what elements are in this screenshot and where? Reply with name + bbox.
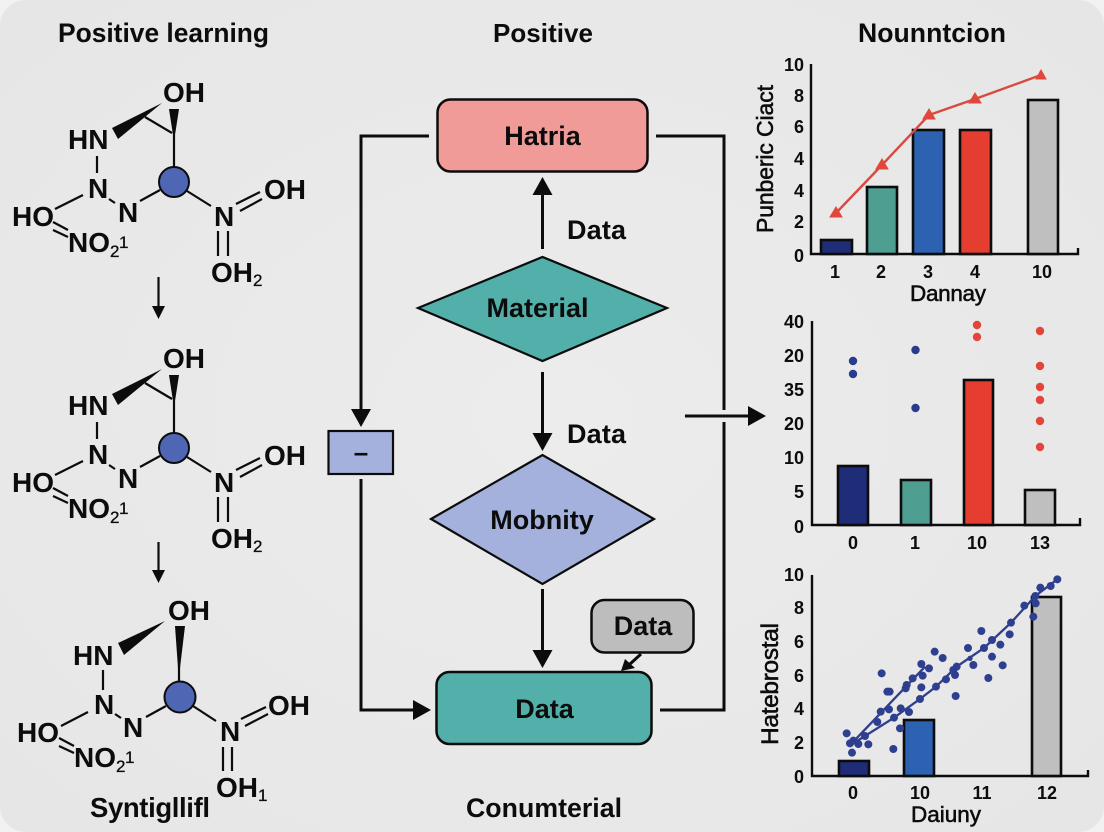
flow box: Data: [436, 672, 652, 744]
chart 1 x labels: 4: [970, 262, 980, 282]
flow box: Hatria: [438, 100, 648, 172]
chart 3 y ticks: 8: [794, 598, 804, 618]
chart 3 y ticks: 6: [794, 666, 804, 686]
chart 2 y ticks: 5: [794, 482, 804, 502]
chart 1 y ticks: [784, 55, 804, 266]
chart 2 y ticks: 20: [784, 414, 804, 434]
molecule 3: N: [94, 689, 114, 720]
chart 2 y ticks: [784, 312, 804, 537]
chart 2 axes: [812, 321, 1080, 525]
flow diamond: Mobnity: Mobnity: [490, 505, 594, 535]
caption: molecule column: Syntigllifl: [90, 792, 210, 823]
molecule 3: N: [123, 712, 143, 743]
molecule 3: HN: [73, 640, 113, 671]
molecule 2: N: [118, 463, 138, 494]
flow diamond: Material: Material: [486, 293, 589, 323]
arrow: Material down to Mobnity: [532, 372, 552, 451]
chart 2 y ticks: 35: [784, 380, 804, 400]
chart 3 scatter and trend lines: [843, 575, 1061, 757]
chart 1 y ticks: 8: [794, 86, 804, 106]
flow diamond: Material: [418, 257, 667, 361]
callout: Data bubble: Data: [614, 611, 673, 641]
arrow label: Data upper: Data: [567, 215, 627, 245]
arrow: Material up to Hatria: [532, 177, 552, 249]
arrow label: Data middle: Data: [567, 419, 627, 449]
chart 1: bars and line: [752, 55, 1078, 306]
chart 2 x labels: 10: [967, 533, 987, 553]
molecule 3: OH: [216, 772, 258, 803]
chart 1 x labels: 3: [923, 262, 933, 282]
chart 3 x labels: 0: [848, 783, 858, 803]
chart 3 y ticks: 10: [784, 565, 804, 585]
molecule 3: N: [220, 716, 240, 747]
chart 2 x labels: 0: [848, 533, 858, 553]
molecule 2: [12, 343, 306, 556]
molecule 2: HN: [68, 390, 108, 421]
molecule 3: 1: [125, 748, 134, 767]
callout arrow: [621, 654, 641, 671]
chart 3 y ticks: 0: [794, 767, 804, 787]
chart 1 y ticks: 6: [794, 117, 804, 137]
molecule 1: 2: [110, 242, 119, 261]
chart 3 x labels: 12: [1037, 783, 1057, 803]
chart 3 x-axis label: Daiuny: [911, 802, 982, 827]
flowchart connector: minus box to Data: [361, 479, 431, 720]
molecule 1: NO: [68, 227, 110, 258]
chart 1 y ticks: 0: [794, 246, 804, 266]
molecule 3: 2: [116, 757, 125, 776]
arrow: molecule 2 to 3: [152, 542, 165, 583]
molecule 1: OH: [163, 77, 205, 108]
molecule 2: NO: [68, 493, 110, 524]
molecule 1: N: [118, 197, 138, 228]
molecule 2: 2: [253, 537, 262, 556]
chart 1 x labels: 1: [830, 262, 840, 282]
molecule 2: OH: [163, 343, 205, 374]
molecule 3: OH: [268, 690, 310, 721]
chart 1 line: [830, 70, 1046, 217]
chart 2 x labels: 1: [910, 533, 920, 553]
molecule 3: NO: [74, 742, 116, 773]
heading: centre column: Positive: [493, 18, 593, 48]
arrow: molecule 1 to 2: [152, 277, 165, 319]
chart 2 red dots: [973, 321, 1044, 451]
molecule 2: 2: [110, 508, 119, 527]
chart 1 x labels: 10: [1032, 262, 1052, 282]
chart 1 y-axis label: Punberic Ciact: [752, 84, 778, 233]
chart 3 y ticks: 4: [794, 699, 804, 719]
chart 3 y ticks: [784, 565, 804, 787]
chart 2 x labels: 13: [1030, 533, 1050, 553]
molecule 2: N: [88, 439, 108, 470]
chart 3 x labels: 11: [972, 783, 992, 803]
molecule 2: N: [214, 467, 234, 498]
molecule 1: OH: [264, 174, 306, 205]
molecule 1: HN: [68, 124, 108, 155]
caption: flowchart column: Conumterial: [466, 793, 622, 823]
chart 2 blue dots: [849, 346, 920, 412]
molecule 2: HO: [12, 467, 54, 498]
chart 3 y ticks: 6: [794, 632, 804, 652]
arrow: Mobnity down to Data: [532, 589, 552, 668]
minus box: [328, 431, 393, 474]
chart 3 y-axis label: Hatebrostal: [757, 623, 784, 745]
molecule 1: HO: [12, 201, 54, 232]
chart 1 y ticks: 4: [794, 181, 804, 201]
chart 1 bars: [821, 100, 1058, 254]
molecule 2: OH: [211, 523, 253, 554]
molecule 1: OH: [211, 257, 253, 288]
chart 2 bars: [838, 380, 1055, 525]
flowchart connector: Hatria to Data on right: [656, 136, 724, 710]
chart 1 y ticks: 2: [794, 212, 804, 232]
heading: left column: Positive learning: [58, 18, 269, 48]
minus box: –: [354, 437, 368, 467]
chart 3 y ticks: 2: [794, 733, 804, 753]
chart 2 y ticks: 20: [784, 346, 804, 366]
chart 2 y ticks: 0: [794, 517, 804, 537]
flow box: Data: Data: [515, 694, 575, 724]
chart 2 x labels: [848, 533, 1050, 553]
molecule 3: [17, 595, 310, 805]
flowchart connector: Hatria to minus box: [351, 136, 429, 427]
chart 1 y ticks: 4: [794, 149, 804, 169]
arrow: flowchart to charts: [685, 406, 766, 426]
chart 1 axes: [811, 64, 1078, 254]
molecule 1: 1: [119, 233, 128, 252]
molecule 1: [12, 77, 306, 290]
chart 1 x labels: [830, 262, 1052, 282]
flow diamond: Mobnity: [431, 455, 654, 584]
chart 3: bars and scatter: [757, 565, 1088, 827]
molecule 1: N: [214, 201, 234, 232]
chart 1 x-axis label: Dannay: [910, 281, 987, 306]
chart 3 x labels: [848, 783, 1057, 803]
chart 1 x labels: 2: [876, 262, 886, 282]
callout: Data bubble: [592, 600, 694, 652]
chart 3 bars: [839, 597, 1061, 776]
heading: right column: Nounntcion: [858, 18, 1006, 48]
chart 1 y ticks: 10: [784, 55, 804, 75]
molecule 3: HO: [17, 717, 59, 748]
molecule 3: OH: [168, 595, 210, 626]
molecule 2: OH: [264, 440, 306, 471]
chart 2 y ticks: 10: [784, 448, 804, 468]
chart 3 axes: [812, 575, 1088, 776]
molecule 2: 1: [119, 499, 128, 518]
molecule 1: 2: [253, 271, 262, 290]
molecule 1: N: [88, 173, 108, 204]
molecule 3: 1: [258, 786, 267, 805]
chart 2 y ticks: 40: [784, 312, 804, 332]
chart 3 x labels: 10: [910, 783, 930, 803]
chart 2: bars and dots: [784, 312, 1080, 553]
flow box: Hatria: Hatria: [504, 121, 582, 151]
